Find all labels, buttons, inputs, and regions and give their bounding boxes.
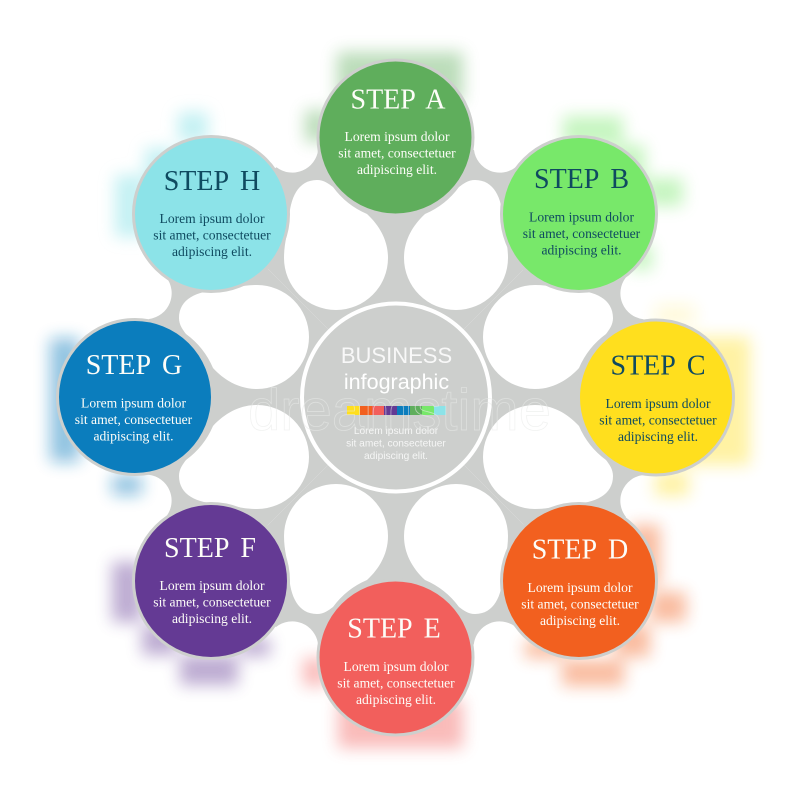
- grey network shape: [83, 84, 709, 710]
- step B: STEP B: [534, 164, 629, 195]
- step D: STEP D: [532, 534, 628, 566]
- step E: sit amet, consectetuer: [337, 676, 455, 690]
- blurred shadows: step H: [115, 112, 208, 237]
- step H: [134, 136, 288, 292]
- step D: sit amet, consectetuer: [521, 596, 639, 612]
- step G: sit amet, consectetuer: [75, 412, 193, 427]
- step C: [578, 320, 734, 475]
- blurred shadows: step G: [50, 338, 142, 495]
- step B: Lorem ipsum dolor: [529, 210, 634, 224]
- centre circle: [302, 304, 490, 492]
- step A: sit amet, consectetuer: [338, 146, 456, 160]
- step C: Lorem ipsum dolor: [606, 396, 711, 411]
- step A: Lorem ipsum dolor: [345, 129, 450, 144]
- step B: adipiscing elit.: [541, 242, 622, 258]
- step C: sit amet, consectetuer: [599, 412, 717, 428]
- step B: [502, 136, 656, 292]
- step E: Lorem ipsum dolor: [344, 659, 449, 674]
- centre body text: Lorem ipsum dolor: [354, 426, 439, 437]
- step C: STEP C: [610, 350, 706, 382]
- step F: sit amet, consectetuer: [153, 594, 271, 610]
- step F: Lorem ipsum dolor: [160, 578, 265, 593]
- centre body text: adipiscing elit.: [364, 451, 428, 462]
- centre body text: [346, 426, 446, 462]
- step D: Lorem ipsum dolor: [528, 580, 633, 595]
- step A: [318, 60, 473, 215]
- step G: adipiscing elit.: [93, 428, 174, 444]
- step H: sit amet, consectetuer: [153, 228, 271, 242]
- step E: [318, 580, 473, 735]
- blurred shadows: step B: [563, 116, 683, 270]
- step A: adipiscing elit.: [357, 162, 437, 177]
- step C: adipiscing elit.: [618, 429, 698, 444]
- blurred shadows: step E: [303, 658, 463, 748]
- white teardrop cut-outs: [179, 180, 613, 614]
- step A: STEP A: [350, 84, 446, 116]
- step E: adipiscing elit.: [356, 692, 436, 707]
- blurred shadows: step F: [112, 562, 270, 685]
- step F: adipiscing elit.: [172, 611, 252, 626]
- step H: adipiscing elit.: [172, 244, 252, 259]
- step G: STEP G: [86, 350, 182, 381]
- step D: adipiscing elit.: [540, 613, 620, 628]
- centre body text: sit amet, consectetuer: [346, 438, 446, 450]
- step G: [58, 320, 212, 474]
- step E: STEP E: [347, 614, 441, 644]
- watermark: dreamstime: [248, 378, 551, 443]
- centre title: infographic: [344, 370, 449, 394]
- step F: STEP F: [164, 533, 256, 564]
- centre colour bar: [347, 406, 446, 415]
- centre title: BUSINESS: [341, 343, 452, 368]
- blurred shadows: step A: [305, 52, 463, 142]
- step H: STEP H: [164, 166, 260, 197]
- step G: Lorem ipsum dolor: [81, 396, 186, 410]
- step F: [134, 504, 288, 658]
- step H: Lorem ipsum dolor: [160, 211, 265, 226]
- step D: [502, 504, 656, 658]
- blurred shadows: step D: [525, 525, 686, 686]
- step B: sit amet, consectetuer: [523, 226, 641, 241]
- centre title: [341, 343, 452, 394]
- blurred shadows: step C: [655, 305, 750, 496]
